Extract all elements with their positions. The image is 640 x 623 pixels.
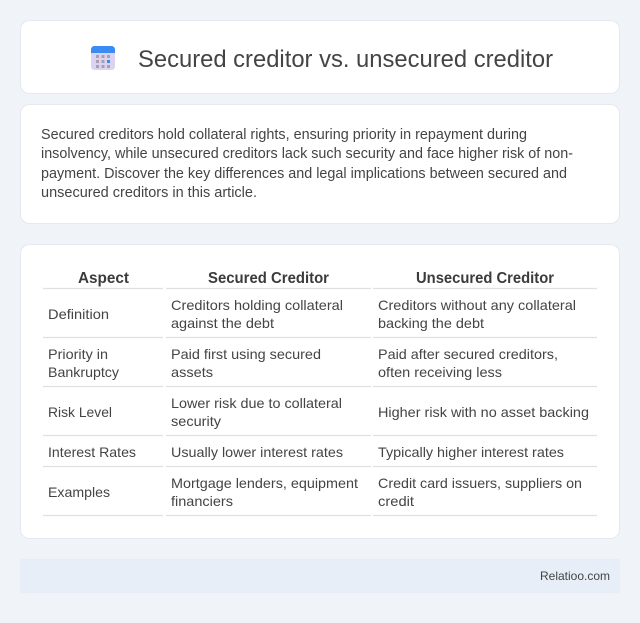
row: examples: financiers	[171, 493, 233, 509]
table header: Unsecured Creditor	[416, 270, 554, 287]
panel: comparison table	[20, 244, 620, 538]
row: priority in bankruptcy: Priority in	[48, 346, 108, 362]
table header	[78, 270, 554, 287]
text block: introduction: insolvency, while unsecured creditors lack such security and face higher risk of non-	[41, 146, 573, 162]
row: priority in bankruptcy	[48, 346, 558, 380]
row: risk level	[48, 395, 589, 429]
text block: introduction: unsecured creditors in this article.	[41, 185, 257, 201]
row: risk level: security	[171, 413, 221, 429]
row: priority in bankruptcy: assets	[171, 364, 213, 380]
row: risk level: Lower risk due to collateral	[171, 395, 342, 411]
panel: title card	[20, 20, 620, 94]
text block: introduction: payment. Discover the key differences and legal implications between secured and	[41, 166, 567, 182]
icon: calendar grid	[91, 46, 115, 70]
row: priority in bankruptcy: Bankruptcy	[48, 364, 119, 380]
row: interest rates: Typically higher interest rates	[378, 444, 564, 460]
row: priority in bankruptcy: often receiving less	[378, 364, 502, 380]
footer	[20, 559, 620, 593]
row: interest rates: Interest Rates	[48, 444, 136, 460]
table header: Secured Creditor	[208, 270, 329, 287]
row: examples: credit	[378, 493, 414, 509]
text block: introduction: Secured creditors hold collateral rights, ensuring priority in repayment during	[41, 127, 527, 143]
row: definition: backing the debt	[378, 315, 484, 331]
row: examples: Credit card issuers, suppliers on	[378, 475, 582, 491]
row: examples	[48, 475, 582, 509]
row: examples: Examples	[48, 484, 110, 500]
text block: introduction	[41, 127, 573, 201]
row: definition: Creditors without any collateral	[378, 297, 576, 313]
row: priority in bankruptcy: Paid first using secured	[171, 346, 321, 362]
row: definition: against the debt	[171, 315, 274, 331]
row: interest rates	[48, 444, 564, 460]
panel: introduction	[20, 104, 620, 224]
row: definition	[48, 297, 576, 331]
footer text: Relatioo.com	[540, 569, 610, 583]
row: priority in bankruptcy: Paid after secured creditors,	[378, 346, 558, 362]
row: definition: Creditors holding collateral	[171, 297, 343, 313]
row: risk level: Higher risk with no asset backing	[378, 404, 589, 420]
row: examples: Mortgage lenders, equipment	[171, 475, 358, 491]
row: definition: Definition	[48, 306, 109, 322]
row: risk level: Risk Level	[48, 404, 112, 420]
row: interest rates: Usually lower interest rates	[171, 444, 343, 460]
table header: Aspect	[78, 270, 129, 287]
title: Secured creditor vs. unsecured creditor	[138, 46, 553, 73]
